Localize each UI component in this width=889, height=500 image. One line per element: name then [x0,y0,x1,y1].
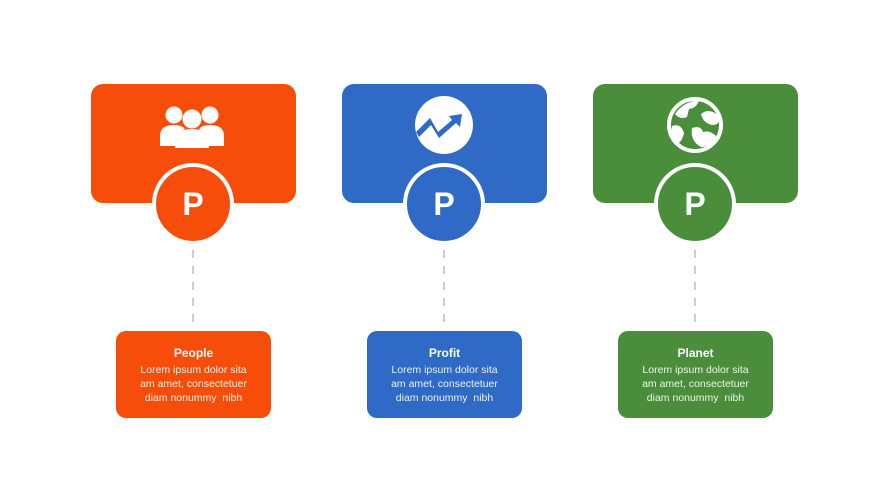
text box: People: Lorem ipsum dolor sita [140,364,247,376]
text box: People: diam nonummy nibh [145,392,242,404]
text box: Profit: diam nonummy nibh [396,392,493,404]
panel: profit [342,84,547,418]
text box: People [116,331,271,418]
badge: P: P [182,186,204,222]
panel: planet [593,84,798,418]
badge: P [152,163,234,245]
connector [694,250,696,322]
text box: Profit [367,331,522,418]
text box: Planet: Lorem ipsum dolor sita [642,364,749,376]
connector [443,250,445,322]
text box: Planet: Planet [677,346,714,360]
icon: globe [667,97,723,153]
card: profit [342,84,547,203]
text box: Planet [618,331,773,418]
icon: people group [160,106,224,148]
icon: growth arrow [415,96,473,154]
connector [192,250,194,322]
badge: P [403,163,485,245]
badge: P [654,163,736,245]
card: planet [593,84,798,203]
text box: Profit: am amet, consectetuer [391,378,498,390]
text box: Profit: Profit [429,346,460,360]
text box: People: People [174,346,213,360]
card: people [91,84,296,203]
panel: people [91,84,296,418]
text box: People: am amet, consectetuer [140,378,247,390]
badge: P: P [684,186,706,222]
badge: P: P [433,186,455,222]
text box: Planet: am amet, consectetuer [642,378,749,390]
text box: Planet: diam nonummy nibh [647,392,744,404]
text box: Profit: Lorem ipsum dolor sita [391,364,498,376]
